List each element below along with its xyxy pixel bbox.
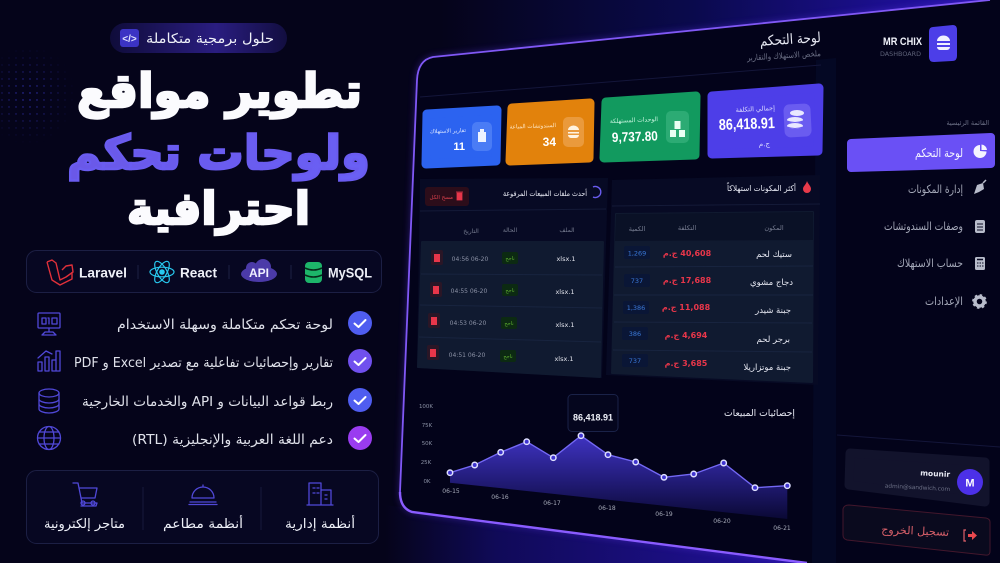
row 3: 04:53 06-20 [450,320,486,327]
feature 2 [38,349,372,373]
icon: api cloud: API [249,266,269,280]
row 4 [427,345,574,363]
dashboard panel [400,0,1000,563]
user card: mounir [920,468,951,479]
card: sandwiches: 34 [543,135,556,149]
row: cheddar [623,301,791,316]
dashboard panel glow [400,0,1000,563]
row: burger: 386 [629,330,641,338]
files table: التاريخ [463,228,479,235]
strip between content and sidebar [812,58,836,563]
dashboard header: ملخص الاستهلاك والتقارير [746,49,821,63]
dashboard header: لوحة التحكم [759,30,821,50]
row 2: 04:55 06-20 [451,288,487,295]
row 4: xlsx.1 [554,355,574,363]
area [450,436,787,519]
card: sandwiches: السندوتشات المباعة [510,123,557,131]
row 3: ناجح [504,321,514,327]
row: chicken: دجاج مشوي [750,278,793,288]
card: sandwiches [510,103,590,161]
y axis labels: 25K [421,460,432,466]
section: top ingredients [606,175,820,385]
row 2: xlsx.1 [555,288,575,296]
icon: code: </> [122,34,137,45]
card: total cost [712,88,819,154]
active menu item: لوحة التحكم [915,146,963,161]
logout button [843,505,990,555]
section: recent files [417,178,608,378]
ingredients table [612,212,813,382]
icon: api cloud [241,259,277,282]
row: cheddar: جبنة شيدر [754,306,791,316]
row: mozzarella [622,354,791,373]
row: chicken: 737 [631,277,643,285]
tech stack bar [26,250,382,292]
card: consumed units: الوحدات المستهلكة [610,116,658,125]
section: top ingredients: أكثر المكونات استهلاكاً [726,182,796,193]
icon: history [593,186,601,198]
card: total cost: إجمالي التكلفة [735,104,775,114]
icon: building [307,483,333,505]
logo [929,25,957,62]
x axis labels: 06-18 [598,505,616,512]
card: consumption reports: تقارير الاستهلاك [430,128,467,135]
row 4: ناجح [503,354,513,360]
card: consumed units: 9,737.80 [612,128,658,145]
feature 4: دعم اللغة العربية والإنجليزية (RTL) [132,432,333,448]
line [450,436,787,488]
row 1: ناجح [505,256,515,262]
dashboard header [746,30,821,63]
sales chart: إحصائيات المبيعات [724,408,795,419]
user card: M [965,478,975,490]
row: chicken [624,274,793,288]
section: recent files: أحدث ملفات المبيعات المرفوعة [503,188,587,198]
label: react: React [180,264,217,280]
points [447,433,790,490]
x axis labels: 06-19 [655,511,673,518]
promo chip [110,23,287,53]
menu heading: القائمة الرئيسية [946,119,989,127]
brand name: MR CHIX [883,36,923,48]
user card: admin@sandwich.com [885,484,951,493]
x axis labels [442,488,791,532]
tooltip: 86,418.91 [573,412,614,424]
title: احترافية [127,182,310,235]
title [67,64,370,235]
y axis labels: 100K [419,404,433,410]
sales chart [419,394,795,532]
icon: mysql [305,262,322,283]
x axis labels: 06-21 [773,525,791,532]
feature 1: لوحة تحكم متكاملة وسهلة الاستخدام [117,317,333,333]
menu: consumption calc: حساب الاستهلاك [897,256,963,270]
label: restaurant systems: أنظمة مطاعم [163,515,243,532]
x axis labels: 06-17 [543,500,561,507]
x axis labels: 06-15 [442,488,460,495]
menu: sandwich recipes: وصفات السندوتشات [884,219,963,234]
systems box [26,470,378,544]
menu: settings: الإعدادات [925,294,963,308]
row 3 [428,313,575,329]
button: clear all [425,187,469,206]
row: mozzarella: 3,685 ج.م [665,359,708,368]
row 1 [431,250,576,265]
row: steak: 1,269 [628,250,646,258]
y axis labels: 75K [422,423,433,429]
y axis labels [419,404,433,485]
glow above dashboard [440,0,1000,60]
card: consumption reports: 11 [453,141,465,153]
title: تطوير مواقع [77,64,362,119]
files table: الحالة [503,227,517,234]
title: ولوحات تحكم [67,126,370,181]
label: mysql: MySQL [328,264,372,280]
row: mozzarella: 737 [629,357,641,365]
row: chicken: 17,688 ج.م [663,276,712,285]
menu: ingredients: إدارة المكونات [908,182,963,197]
ingredients table: المكون [764,224,784,232]
ingredients table: التكلفة [678,224,696,232]
cart wheels [81,501,95,505]
card: total cost: 86,418.91 [719,115,775,134]
files table: الملف [559,227,575,234]
ingredients table: الكمية [629,225,645,233]
card: total cost: ج.م [759,140,771,148]
icon: cart [73,483,97,506]
icon: code [120,29,139,47]
row 4: 04:51 06-20 [449,352,485,359]
label: e-commerce: متاجر إلكترونية [44,517,125,532]
row: steak: 40,608 ج.م [663,249,712,258]
label: laravel: Laravel [79,264,127,280]
card: consumption reports [426,110,497,164]
stat cards [426,88,819,164]
feature 2: تقارير وإحصائيات تفاعلية مع تصدير Excel و PDF [74,355,333,371]
row: mozzarella: جبنة موتزاريلا [743,363,791,373]
row: burger [622,327,790,345]
feature 3: ربط قواعد البيانات و API والخدمات الخارجية [82,394,333,410]
row 2: ناجح [505,288,515,294]
row 3: xlsx.1 [555,321,575,329]
icon: react [150,259,174,285]
x axis labels: 06-20 [713,518,731,525]
user card [837,435,1000,502]
row: burger: برجر لحم [757,335,790,345]
y axis labels: 50K [422,441,433,447]
row 1: 04:56 06-20 [452,256,488,263]
row: steak: ستيك لحم [756,250,792,260]
feature 3 [39,388,372,413]
icon: cloche [189,485,217,504]
tooltip [568,394,618,432]
card: consumed units [604,96,696,158]
x axis labels: 06-16 [491,494,509,501]
row: cheddar: 11,088 ج.م [662,303,711,312]
row 1: xlsx.1 [556,255,576,263]
icon: laravel [47,260,73,285]
promo chip: حلول برمجية متكاملة [146,31,274,47]
feature 1 [38,311,372,335]
glow below dashboard [385,505,830,563]
sidebar [837,25,1000,555]
active menu item [851,137,991,168]
files table [418,227,603,377]
row: cheddar: 1,386 [627,304,645,312]
row 2 [430,282,575,297]
row: burger: 4,694 ج.م [665,331,708,340]
label: admin systems: أنظمة إدارية [285,515,355,532]
button: clear all: مسح الكل [429,194,453,201]
feature list [38,311,372,450]
decorative dot grid [1,50,72,142]
feature 4 [38,426,372,450]
y axis labels: 0K [423,479,431,485]
logout button: تسجيل الخروج [881,523,949,539]
icon: flame [803,181,811,193]
row: steak [624,246,792,260]
brand subtitle: DASHBOARD [880,50,921,58]
